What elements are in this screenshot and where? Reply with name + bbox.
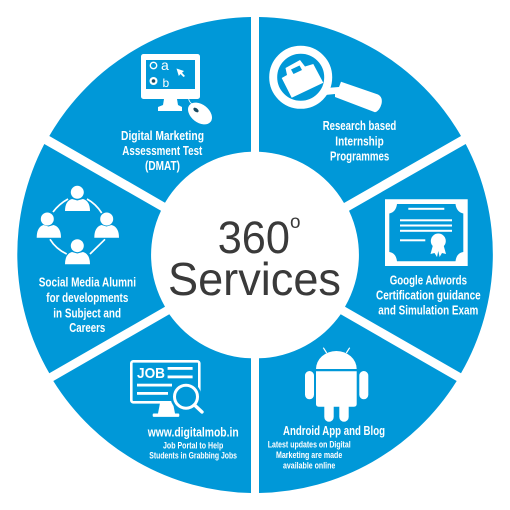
text: Android App and Blog: Marketing are made [276,450,342,460]
text: Google Adwords Certification guidance and Simulation Exam: and Simulation Exam [378,302,478,317]
text: Android App and Blog [268,423,385,470]
panel: Job portal [53,314,251,493]
icon: job monitor with magnifier [131,361,202,417]
icon: monitor with quiz and mouse [141,54,216,129]
icon: android robot [305,348,368,422]
title: 360 degrees Services: 360 [218,212,290,263]
icon: network of people [37,186,119,264]
panel: Digital Marketing Assessment Test [49,17,251,203]
text: Social Media Alumni [39,275,136,335]
text: Research based Internship Programmes: Internship [335,134,384,149]
text: Google Adwords Certification guidance and Simulation Exam: Google Adwords [390,272,467,287]
text: Research based Internship Programmes: Research based [323,118,396,133]
text: Android App and Blog: available online [283,460,335,470]
text: www.digitalmob.in Job Portal [147,425,239,461]
title: 360 degrees Services [168,212,341,305]
panel: Android App and Blog [259,314,457,493]
text: Digital Marketing Assessment Test (DMAT): (DMAT) [145,158,180,173]
text: Research based Internship Programmes: Programmes [330,149,389,164]
title: 360 degrees Services: Services [168,253,341,305]
text: Digital Marketing Assessment Test (DMAT): Assessment Test [122,143,203,158]
icon: monitor with quiz and mouse: b [162,76,170,90]
title: 360 degrees Services: o [290,212,300,233]
icon: certificate with rosette [385,199,468,266]
text: Social Media Alumni: Social Media Alumni [39,275,136,290]
text: Research based Internship Programmes [323,118,396,164]
text: Google Adwords Certification guidance and Simulation Exam [376,272,481,317]
text: www.digitalmob.in Job Portal: Job Portal to Help [163,440,224,450]
panel: Social Media Alumni [17,144,165,373]
text: Social Media Alumni: in Subject and [53,305,121,320]
icon: job monitor with magnifier: JOB [137,365,165,382]
text: Android App and Blog: Latest updates on Digital [268,439,351,449]
text: Digital Marketing Assessment Test (DMAT): Digital Marketing [121,128,204,143]
text: www.digitalmob.in Job Portal: Students in Grabbing Jobs [149,451,237,461]
icon: monitor with quiz and mouse: a [161,57,169,73]
panel: Research based Internship Programmes [259,17,461,203]
panel: Google Adwords Certification [345,144,493,373]
text: Google Adwords Certification guidance and Simulation Exam: Certification guidance [376,287,481,302]
icon: magnifier over briefcase [273,50,382,112]
text: Social Media Alumni: for developments [46,290,128,305]
text: Digital Marketing Assessment Test (DMAT) [121,128,204,173]
text: Social Media Alumni: Careers [69,320,105,335]
text: www.digitalmob.in Job Portal: www.digitalmob.in [147,425,239,440]
text: Android App and Blog: Android App and Blog [283,423,385,438]
